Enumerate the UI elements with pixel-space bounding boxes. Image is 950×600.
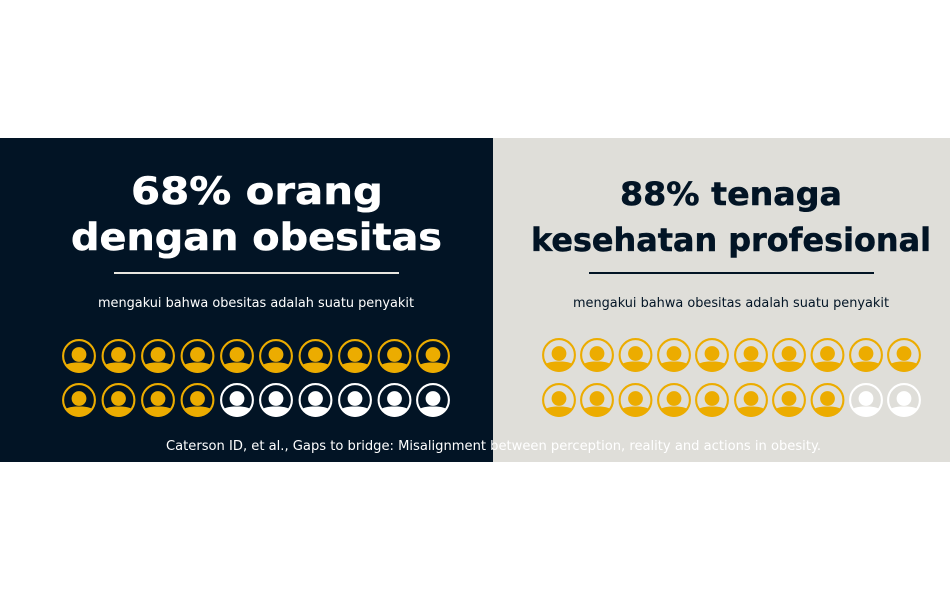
divider <box>589 272 874 274</box>
divider <box>114 272 399 274</box>
icon row: 10 gold people <box>63 340 449 373</box>
panel: patients <box>0 138 493 462</box>
text: recognise obesity as a disease: mengakui bahwa obesitas adalah suatu penyakit <box>98 296 414 311</box>
heading: 88% of health professionals <box>531 175 931 259</box>
heading: 68% of people with obesity: 68% orang <box>131 170 383 213</box>
icon row: 4 gold people <box>63 384 213 417</box>
heading: 88% of health professionals: kesehatan profesional <box>531 221 931 259</box>
icon row: 8 gold people <box>543 384 843 417</box>
heading: 68% of people with obesity <box>71 170 442 259</box>
icon row: 2 white people <box>850 384 920 417</box>
text: recognise obesity as a disease: mengakui bahwa obesitas adalah suatu penyakit <box>573 296 889 311</box>
heading: 68% of people with obesity: dengan obesitas <box>71 216 442 259</box>
icon row: 6 white people <box>221 384 449 417</box>
heading: 88% of health professionals: 88% tenaga <box>620 175 842 213</box>
source note: Caterson ID, et al., Gaps to bridge: Misalignment between perception, reality and actions in obesity. <box>166 439 821 454</box>
icon row: 10 gold people <box>543 339 920 372</box>
panel: health professionals <box>493 138 950 462</box>
